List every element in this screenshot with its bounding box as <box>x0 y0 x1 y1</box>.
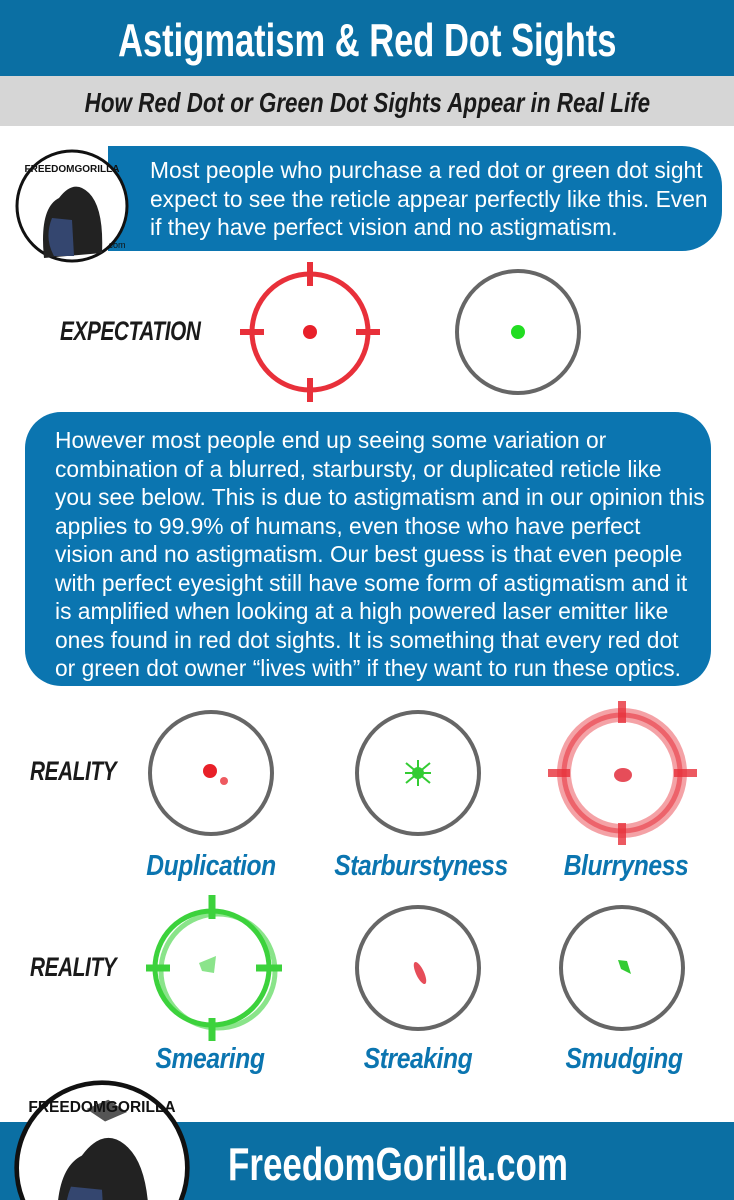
label: reality row 1: REALITY <box>30 756 116 786</box>
label: streaking: Streaking <box>364 1043 472 1075</box>
bubble: reality explanation: ones found in red dot sights. It is something that every red dot <box>55 626 678 652</box>
logo footer: FREEDOMGORILLA <box>28 1099 176 1116</box>
label: blurryness: Blurryness <box>564 850 688 882</box>
bubble: reality explanation: or green dot owner “lives with” if they want to run these optics. <box>55 655 681 681</box>
footer band: FreedomGorilla.com <box>228 1138 568 1190</box>
label: expectation: EXPECTATION <box>60 316 201 346</box>
logo top <box>16 150 128 262</box>
bubble: reality explanation: combination of a blurred, starbursty, or duplicated reticle like <box>55 456 662 482</box>
logo footer <box>14 1080 190 1200</box>
header: title: Astigmatism & Red Dot Sights <box>118 14 616 66</box>
reticle: green expectation <box>455 269 581 395</box>
bubble: expectation text: expect to see the reticle appear perfectly like this. Even <box>150 186 708 212</box>
bubble: reality explanation: However most people end up seeing some variation or <box>55 427 606 453</box>
reticle: starburst <box>355 710 481 836</box>
logo top: .com <box>106 240 126 250</box>
reticle: red expectation <box>240 262 380 402</box>
label: reality row 2: REALITY <box>30 952 116 982</box>
bubble: expectation text: if they have perfect vision and no astigmatism. <box>150 214 618 240</box>
bubble: expectation text <box>108 146 722 251</box>
bubble: reality explanation: vision and no astigmatism. Our best guess is that even people <box>55 541 682 567</box>
reticle: streaking <box>355 905 481 1031</box>
bubble: expectation text: Most people who purchase a red dot or green dot sight <box>150 157 703 183</box>
bubble: reality explanation: applies to 99.9% of humans, even those who have perfect <box>55 512 640 538</box>
reticle: blurry <box>548 701 697 845</box>
label: duplication: Duplication <box>146 850 276 882</box>
bubble: reality explanation: is amplified when looking at a high powered laser emitter like <box>55 598 668 624</box>
subtitle band <box>0 76 734 126</box>
label: smearing: Smearing <box>156 1043 264 1075</box>
bubble: reality explanation <box>25 412 711 686</box>
header: title <box>0 0 734 76</box>
logo top: FREEDOMGORILLA <box>24 164 120 175</box>
label: starburstyness: Starburstyness <box>334 850 508 882</box>
reticle: duplication <box>148 710 274 836</box>
label: smudging: Smudging <box>565 1043 683 1075</box>
subtitle band: How Red Dot or Green Dot Sights Appear in Real Life <box>84 87 650 118</box>
reticle: smearing <box>146 895 282 1041</box>
reticle: smudging <box>559 905 685 1031</box>
footer band <box>0 1122 734 1200</box>
bubble: reality explanation: you see below. This is due to astigmatism and in our opinion this <box>55 484 705 510</box>
bubble: reality explanation: with perfect eyesight still have some form of astigmatism and it <box>55 570 687 596</box>
